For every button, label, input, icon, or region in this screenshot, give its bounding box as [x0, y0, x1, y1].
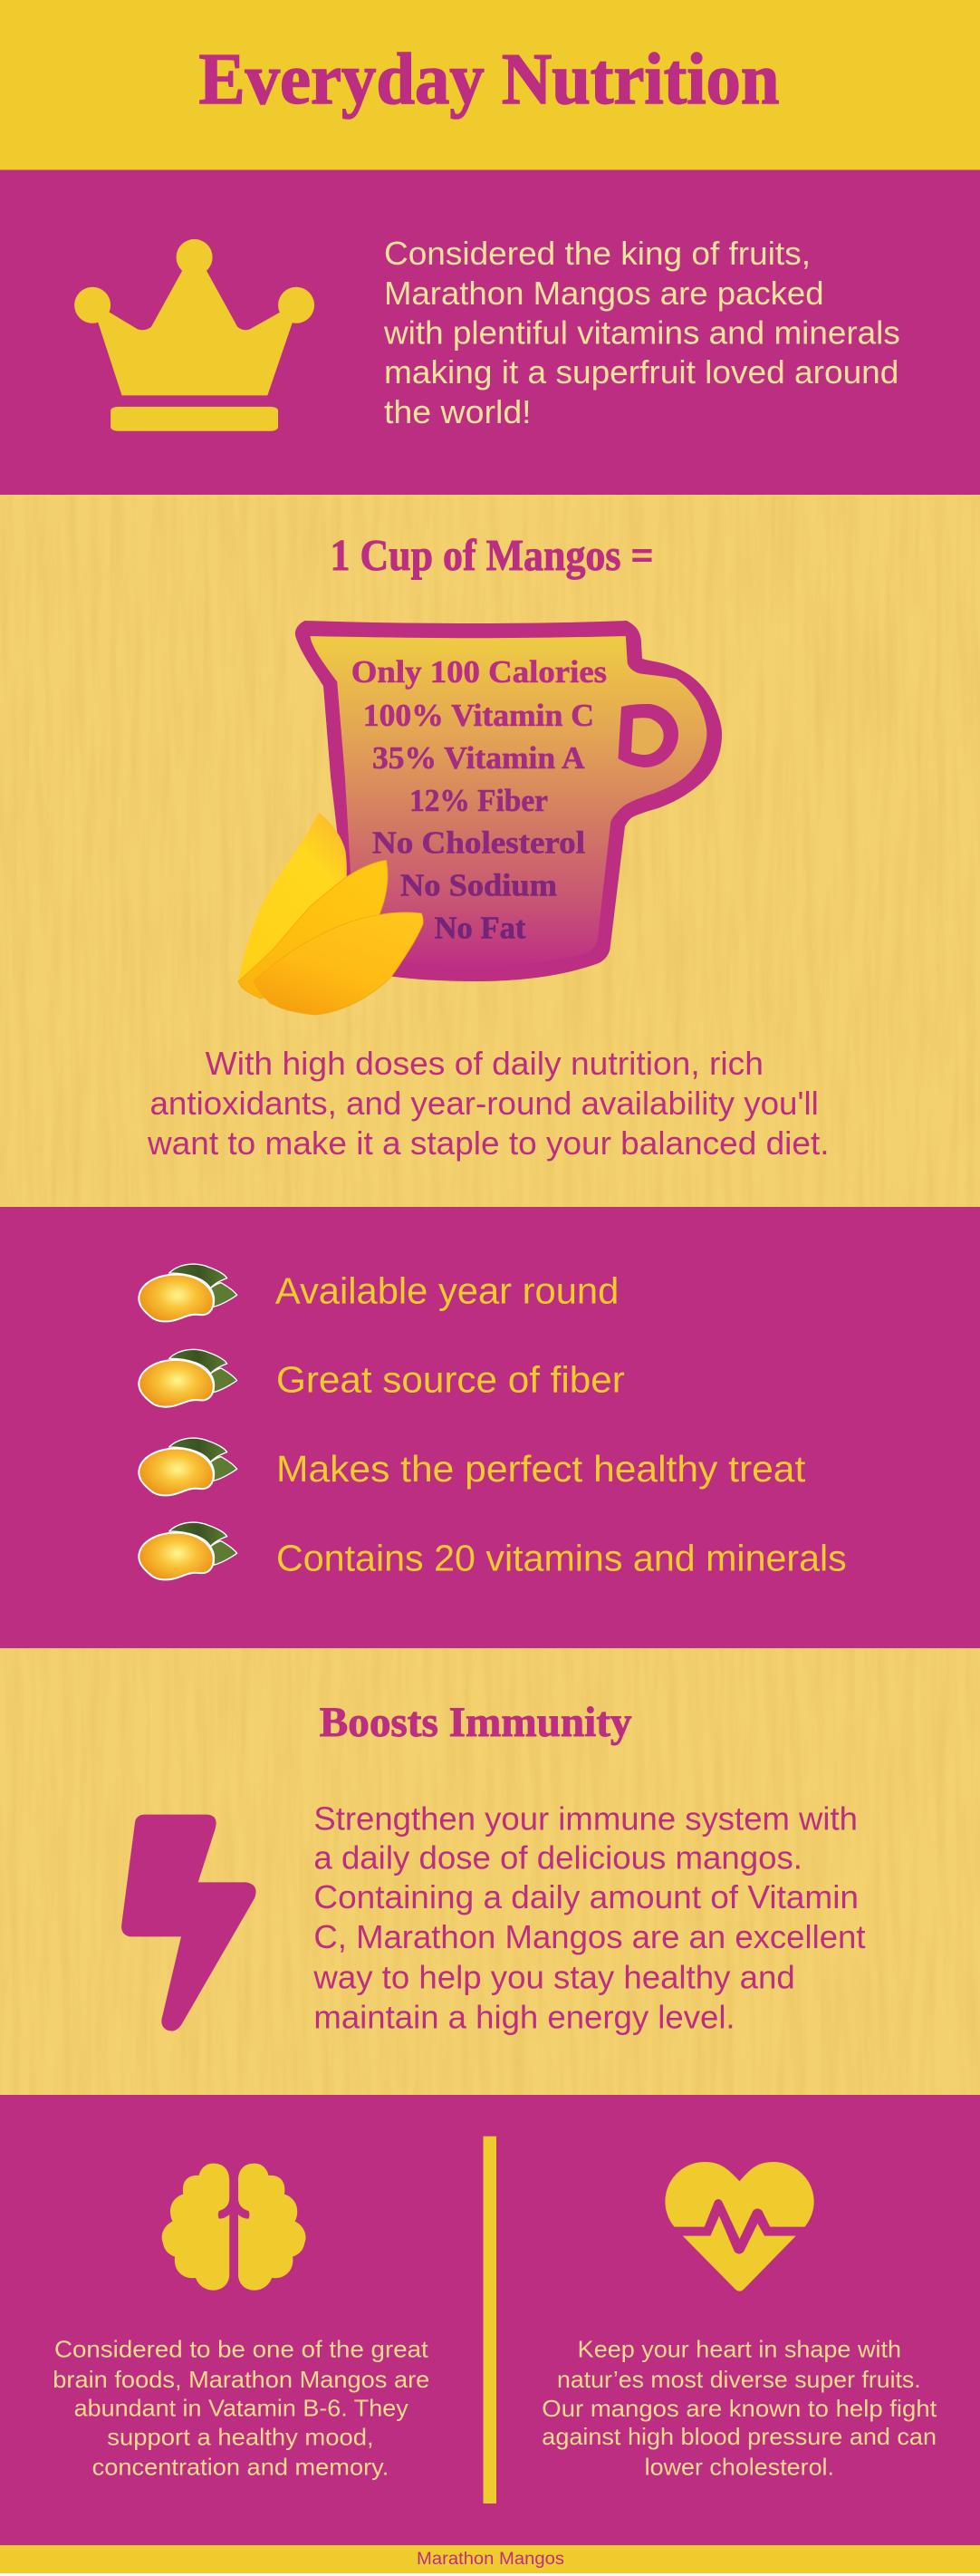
nutrition facts: 12% Fiber [409, 783, 548, 818]
title: Everyday Nutrition [199, 38, 779, 120]
intro text [383, 235, 900, 430]
text: brain foods: support a healthy mood, [107, 2423, 374, 2450]
intro text: Marathon Mangos are packed [384, 275, 824, 312]
icon: lightning bolt [121, 1815, 256, 2031]
panel: brain and heart [0, 2095, 980, 2545]
footer text: Marathon Mangos [417, 2550, 564, 2569]
panel: benefits list [0, 1207, 980, 1648]
nutrition facts: 35% Vitamin A [372, 740, 585, 776]
text: heart health: Keep your heart in shape with [578, 2336, 901, 2363]
icon: brain [162, 2164, 306, 2291]
paragraph: immunity: way to help you stay healthy and [312, 1958, 795, 1995]
paragraph: immunity: C, Marathon Mangos are an excellent [313, 1918, 865, 1955]
icon: heart with pulse [665, 2162, 814, 2291]
text: heart health: natur’es most diverse super fruits. [557, 2366, 921, 2393]
text: brain foods: abundant in Vatamin B-6. They [74, 2395, 408, 2422]
benefits text: Contains 20 vitamins and minerals [276, 1537, 847, 1578]
benefits text: Makes the perfect healthy treat [276, 1448, 806, 1490]
text: heart health [542, 2336, 937, 2481]
panel: 1 cup of mangos [0, 495, 980, 1207]
nutrition facts: 100% Vitamin C [363, 698, 594, 733]
image: mango slices [238, 813, 423, 1015]
divider bar [484, 2137, 496, 2504]
benefits text [275, 1269, 847, 1578]
icon: mango 3 [139, 1438, 237, 1495]
intro text: Considered the king of fruits, [384, 235, 811, 272]
nutrition facts: No Sodium [400, 868, 557, 903]
paragraph: daily nutrition: antioxidants, and year-round availability you'll [150, 1085, 819, 1122]
nutrition facts [351, 654, 607, 946]
paragraph: immunity: a daily dose of delicious mangos. [313, 1838, 802, 1876]
paragraph: immunity: maintain a high energy level. [313, 1998, 735, 2035]
nutrition facts: No Cholesterol [372, 825, 585, 861]
heading: boosts immunity: Boosts Immunity [320, 1699, 632, 1746]
panel: title band [0, 0, 980, 170]
text: brain foods [53, 2336, 429, 2481]
icon: mango 1 [139, 1264, 237, 1321]
nutrition facts: No Fat [435, 911, 526, 946]
text: heart health: lower cholesterol. [645, 2454, 834, 2481]
paragraph: daily nutrition [147, 1045, 830, 1162]
panel: footer [0, 2545, 980, 2573]
text: brain foods: Considered to be one of the great [54, 2336, 429, 2363]
text: brain foods: concentration and memory. [92, 2454, 389, 2481]
paragraph: immunity: Strengthen your immune system with [313, 1799, 858, 1837]
nutrition facts: Only 100 Calories [351, 654, 607, 690]
paragraph: immunity [312, 1799, 866, 2035]
intro text: the world! [384, 393, 532, 430]
paragraph: immunity: Containing a daily amount of Vitamin [313, 1878, 859, 1915]
panel: boosts immunity [0, 1648, 980, 2095]
intro text: with plentiful vitamins and minerals [383, 314, 900, 352]
text: brain foods: brain foods, Marathon Mangos are [53, 2366, 429, 2393]
heading: 1 cup of mangos: 1 Cup of Mangos = [330, 530, 654, 580]
intro text: making it a superfruit loved around [384, 353, 898, 391]
text: heart health: Our mangos are known to help fight [542, 2395, 937, 2422]
icon: mug [295, 621, 722, 981]
icon: mango 2 [139, 1349, 237, 1407]
panel: king of fruits [0, 170, 980, 495]
icon: mango 4 [139, 1522, 237, 1579]
icon: crown [74, 239, 314, 431]
text: heart health: against high blood pressure and can [542, 2423, 937, 2450]
paragraph: daily nutrition: want to make it a staple to your balanced diet. [147, 1124, 830, 1162]
paragraph: daily nutrition: With high doses of daily nutrition, rich [206, 1045, 764, 1082]
benefits text: Great source of fiber [276, 1359, 625, 1401]
benefits text: Available year round [275, 1269, 619, 1311]
